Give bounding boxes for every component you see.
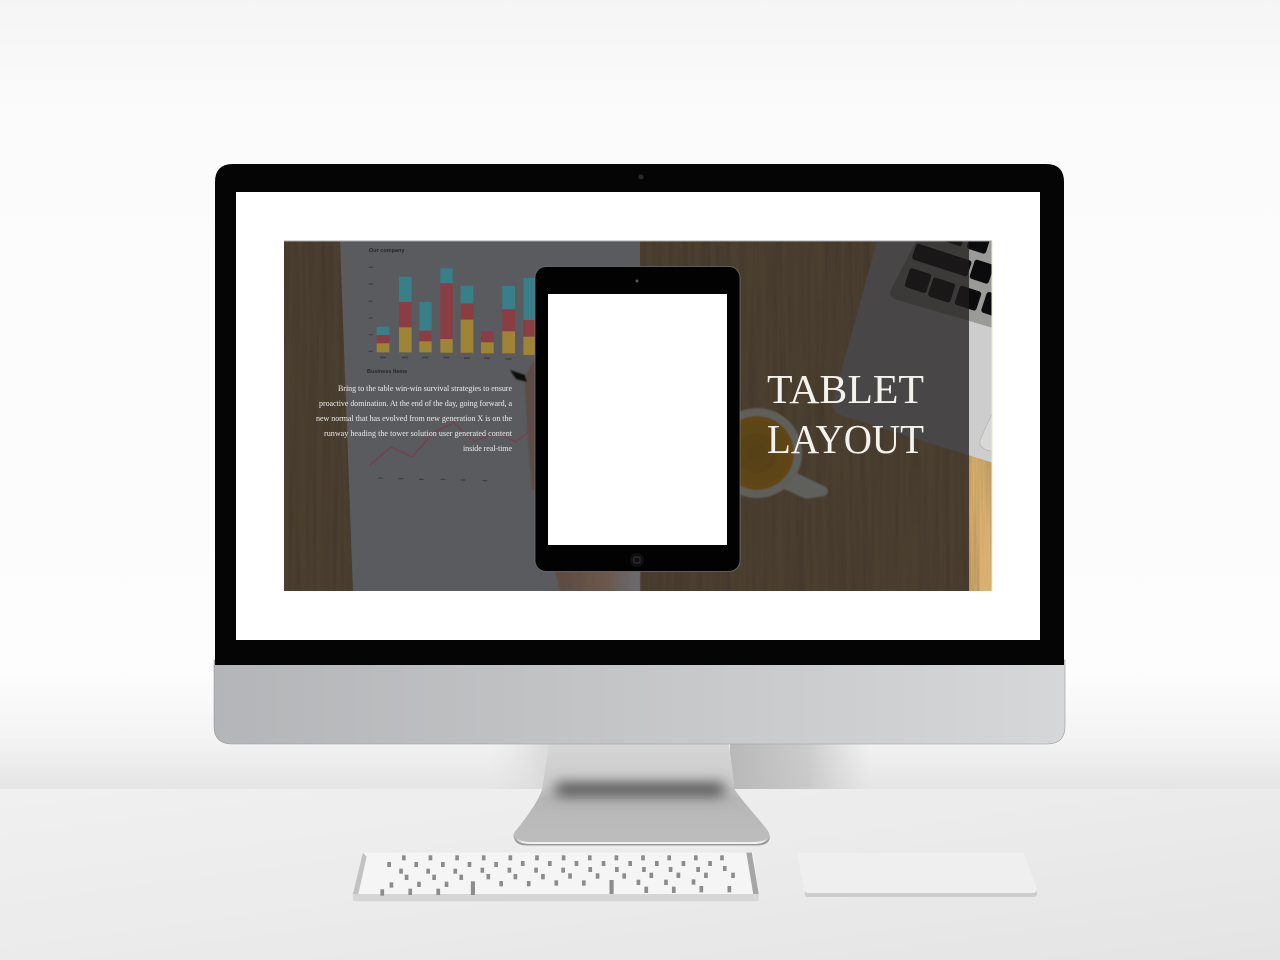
- trackpad: [797, 853, 1037, 897]
- keyboard body: [353, 853, 759, 901]
- line chart on paper: [370, 423, 531, 465]
- monitor: [214, 164, 1065, 744]
- slide title: LAYOUT: [767, 416, 924, 462]
- monitor screen: [236, 192, 1040, 640]
- slide body text: new normal that has evolved from new generation X is on the: [316, 414, 512, 423]
- photo: laptop: [832, 242, 992, 462]
- photo: chart paper: [340, 241, 640, 591]
- tablet camera: [636, 280, 638, 282]
- slide right edge highlight: [992, 241, 993, 591]
- tablet screen: [548, 294, 727, 545]
- slide body text: Bring to the table win-win survival strategies to ensure: [338, 384, 512, 393]
- keyboard: [353, 853, 759, 901]
- monitor camera: [638, 174, 644, 180]
- bar chart on paper: [369, 267, 537, 481]
- slide: photo panel: [284, 230, 1003, 591]
- paper heading: business items: Business Items: [367, 369, 407, 375]
- tablet body: [535, 266, 740, 572]
- monitor chin: [214, 660, 1065, 744]
- keyboard key gaps: [380, 855, 735, 896]
- tablet device: [535, 266, 740, 572]
- slide top edge: [284, 240, 992, 242]
- photo: wooden table: [284, 241, 992, 591]
- monitor stand: [513, 744, 770, 846]
- slide body text: runway heading the tower solution user generated content: [324, 429, 513, 438]
- photo: hand holding pen: [510, 360, 640, 591]
- slide title: TABLET: [767, 366, 924, 412]
- monitor bezel: [215, 164, 1064, 665]
- slide body text: inside real-time: [463, 444, 512, 453]
- tablet home button: [630, 553, 644, 567]
- photo: coffee cup: [740, 408, 828, 500]
- photo: dark overlay: [284, 241, 969, 591]
- slide title: [767, 366, 924, 462]
- paper heading: our company: Our company: [369, 248, 405, 254]
- slide body text: proactive domination. At the end of the day, going forward, a: [319, 399, 512, 408]
- slide body text: [316, 384, 513, 453]
- laptop keys: [904, 242, 992, 316]
